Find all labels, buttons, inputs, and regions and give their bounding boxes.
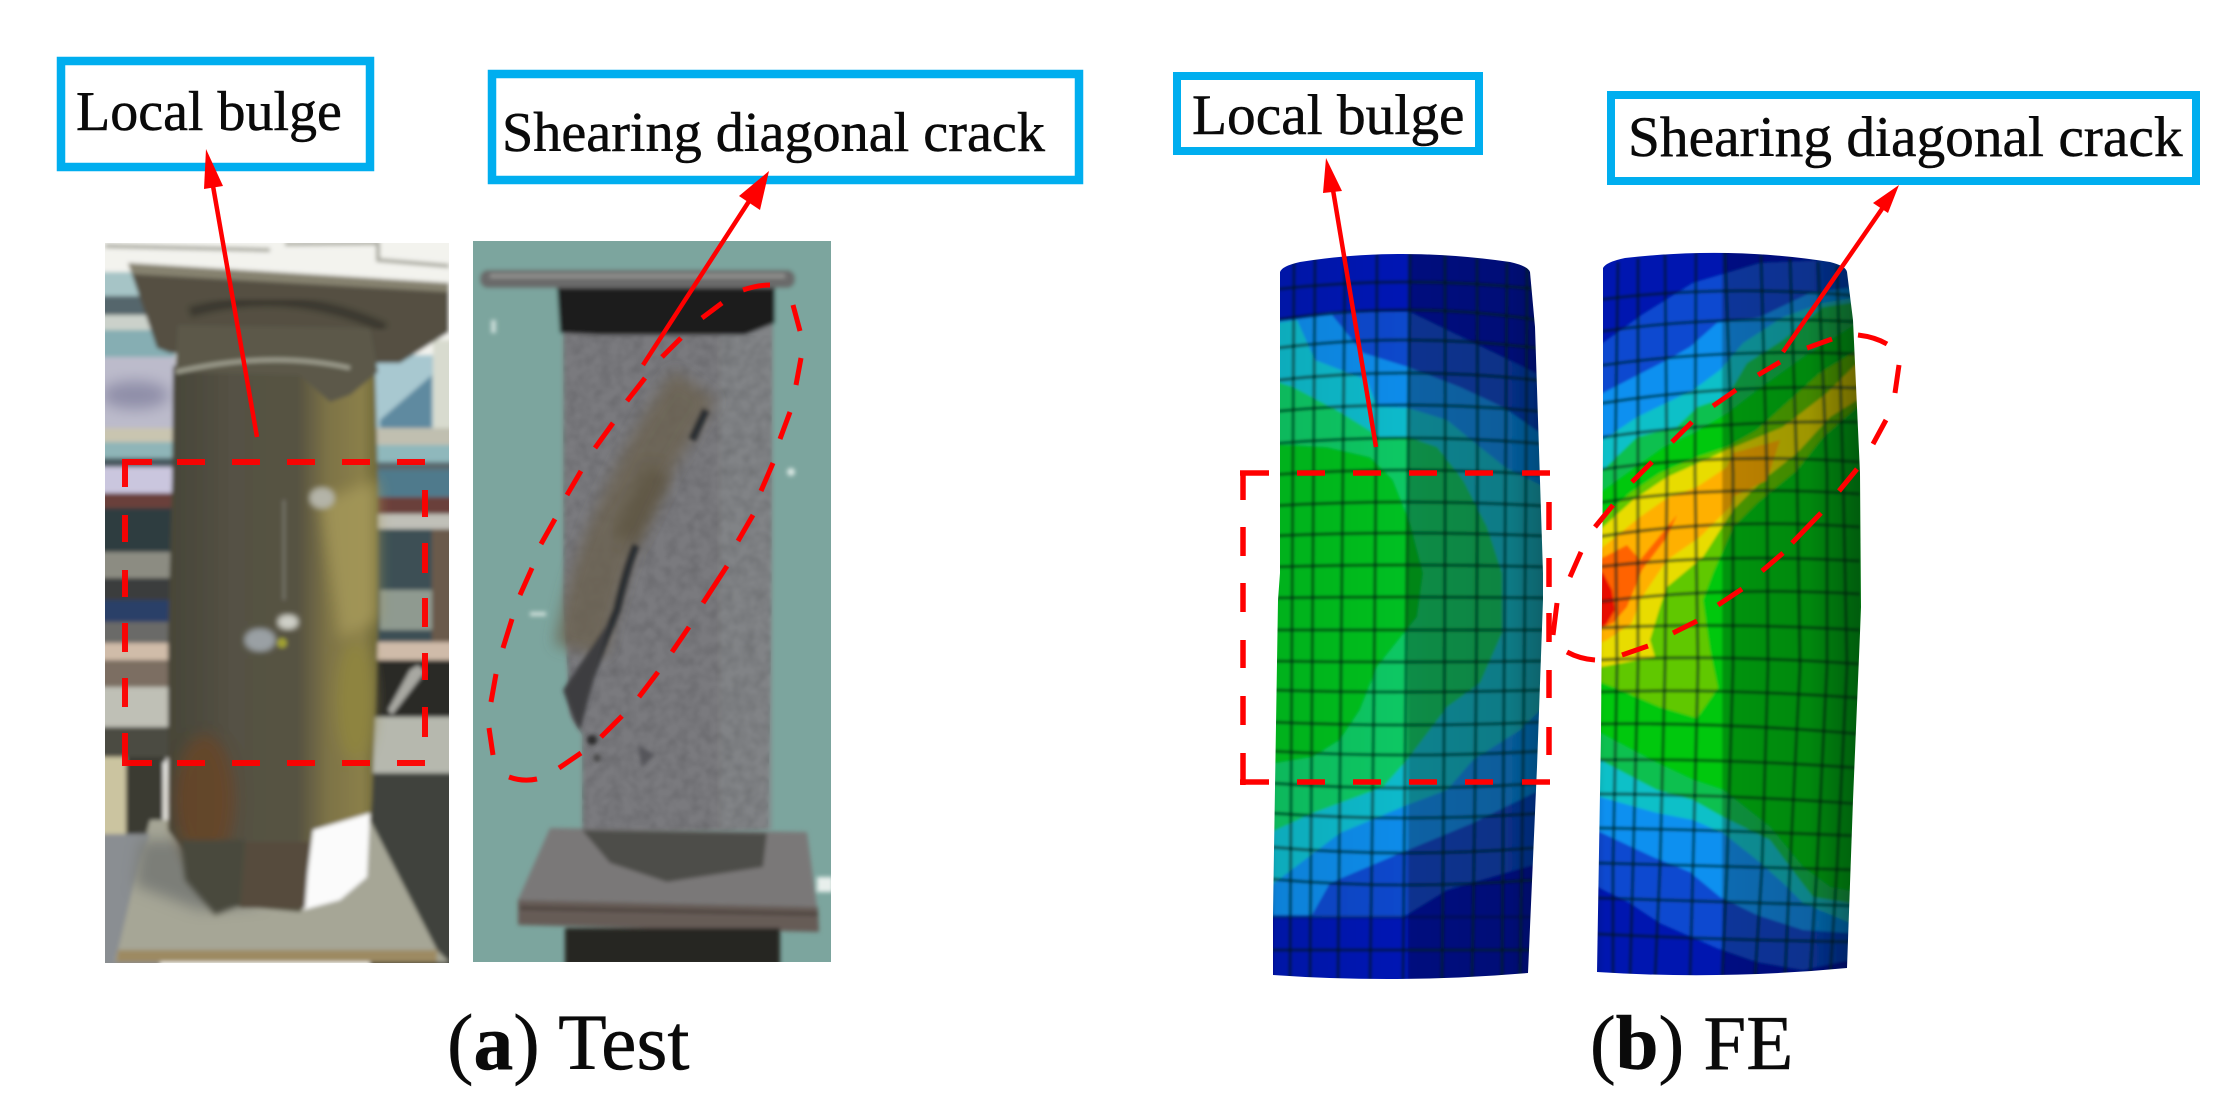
photo: concrete core with diagonal crack (468, 236, 836, 967)
arrow: to Shearing diagonal crack (643, 171, 769, 365)
mesh (1270, 253, 1545, 980)
photo: steel tube specimen with local bulge (100, 238, 455, 969)
caption: (b) FE: (b) FE (1590, 1000, 1793, 1086)
dashed rectangle: bulge region (122, 460, 425, 766)
caption: (a) Test: (a) Test (447, 999, 689, 1087)
callout box: Shearing diagonal crack (Test) (492, 74, 1079, 180)
FE model: left column contour (1265, 245, 1555, 985)
column (168, 366, 378, 912)
column (563, 320, 773, 835)
top plate (128, 263, 449, 363)
arrow: to Local bulge (204, 149, 257, 437)
callout box: Local bulge (Test): Local bulge (76, 81, 342, 143)
arrow: to Shearing diagonal crack (FE) (1783, 185, 1899, 352)
FE model: right column contour (1590, 245, 1870, 985)
arrow: to Local bulge (FE) (1323, 158, 1376, 447)
collar (557, 285, 775, 335)
callout box: Shearing diagonal crack (Test): Shearing diagonal crack (502, 102, 1046, 164)
shading (1270, 245, 1550, 985)
shading (1597, 245, 1862, 985)
callout box: Local bulge (FE): Local bulge (1192, 84, 1464, 147)
callout box: Local bulge (Test) (61, 61, 370, 167)
mesh (1597, 252, 1860, 978)
paper tag (303, 813, 370, 910)
dashed rectangle: bulge region (FE) (1240, 471, 1550, 785)
dashed ellipse: crack region (FE) (1553, 335, 1899, 660)
callout box: Shearing diagonal crack (FE): Shearing diagonal crack (1628, 106, 2183, 169)
base plate (518, 828, 817, 907)
lower rust and dark patches (175, 735, 235, 865)
panel: (b) FE (1177, 76, 2196, 1086)
base plate (113, 820, 449, 962)
callout box: Shearing diagonal crack (FE) (1611, 95, 2196, 181)
top plate (480, 270, 795, 288)
dashed ellipse: crack region (489, 285, 801, 780)
panel: (a) Test (61, 61, 1079, 1087)
crack band (580, 385, 695, 650)
